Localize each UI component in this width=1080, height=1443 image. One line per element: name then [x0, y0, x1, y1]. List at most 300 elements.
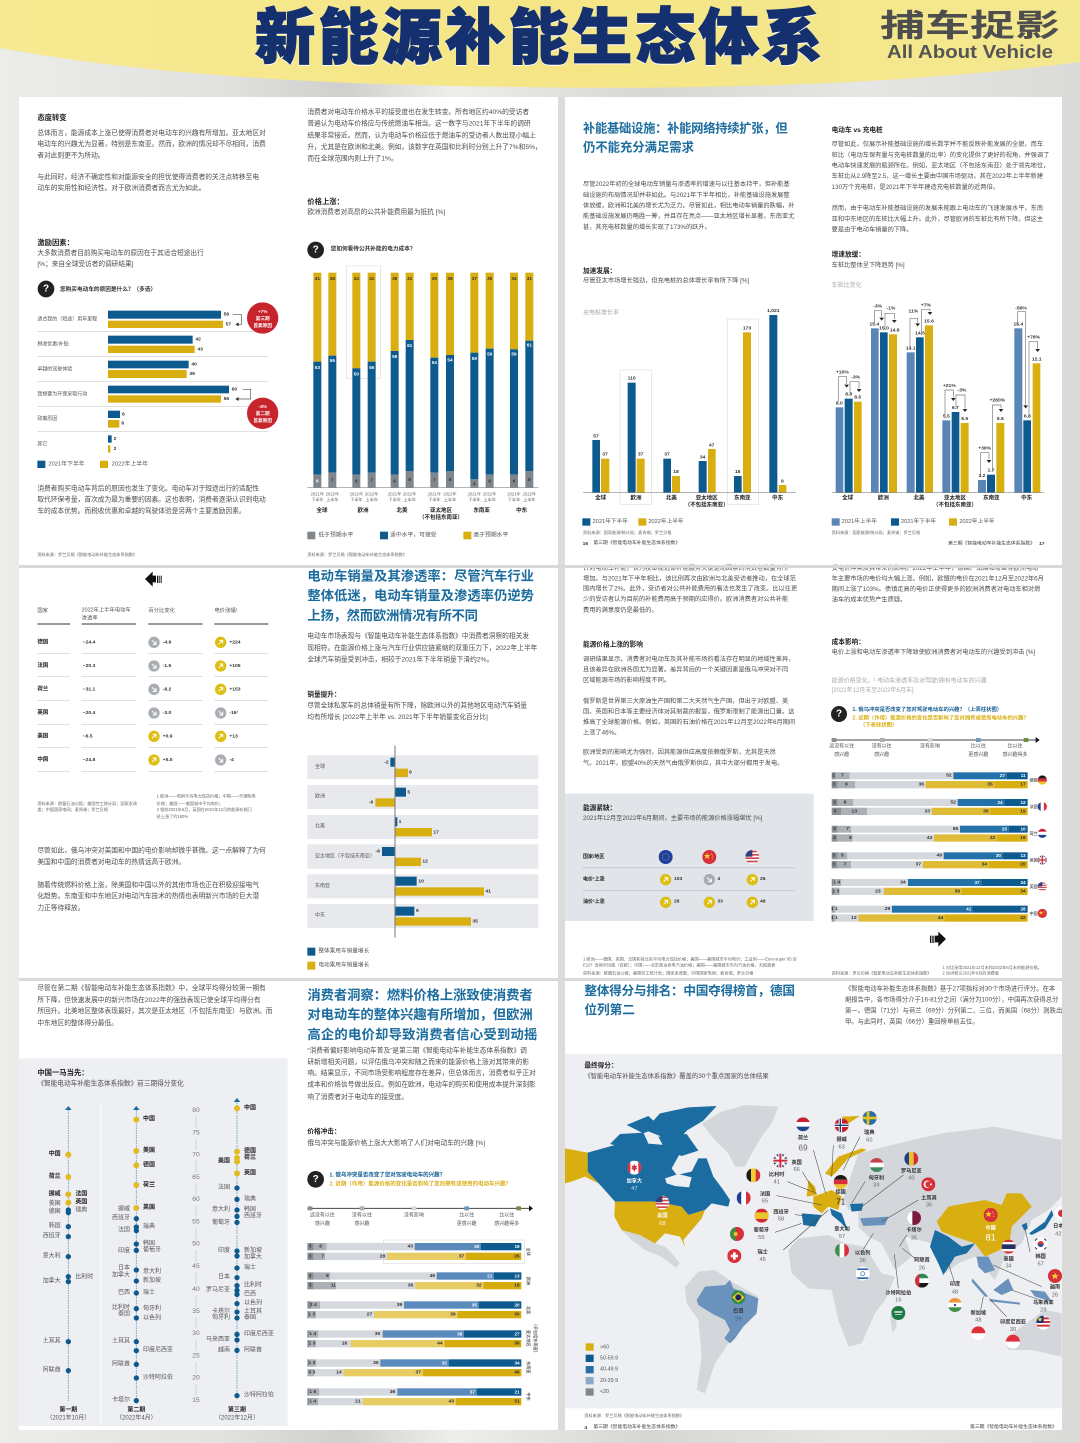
callout: third issue top reason: +7% [258, 309, 268, 314]
Southeast Asia: 30 [373, 1360, 379, 1366]
bar chart: EV to charger ratio: 8.5 [854, 395, 861, 401]
stacked bar chart: public charging cost: 31 [527, 276, 532, 281]
stacked bar chart: public charging cost: 37 [472, 276, 477, 281]
stacked bar chart: public charging cost: 61 [527, 342, 532, 347]
country scores: 69 [798, 1143, 808, 1153]
stacked bar chart: public charging cost: 41 [315, 276, 320, 281]
arrows: change brackets: +7% [921, 303, 932, 309]
bar chart: reasons: 适合我的（短途）用车里程 [37, 315, 97, 322]
legend: 电动乘用车销量增长 [318, 961, 370, 969]
Asia Pacific: 44 [437, 1341, 443, 1347]
bar chart: EV to charger ratio: 8.8 [845, 392, 852, 398]
bar chart: charger growth: 全球 [595, 494, 607, 502]
stacked bar chart: public charging cost: 全球 [317, 506, 328, 514]
chart: third issue: （2022年12月） [215, 1413, 259, 1421]
panel: energy shortage table: 103 [674, 876, 683, 882]
table: EV penetration and electricity prices: +13 [229, 733, 238, 739]
bar chart: charger growth: 37 [602, 452, 608, 458]
text block: 化趋势。东南亚和中东地区对电动汽车技术的热情也表明新兴市场的巨大潜 [37, 891, 259, 900]
callout: second issue top reason: -4% [259, 404, 268, 409]
global: 3 [309, 1253, 312, 1259]
chart: second issue: 德国 [143, 1160, 155, 1168]
scale axis: 比以往 [499, 1212, 514, 1219]
arrows: change brackets: -56% [1015, 305, 1027, 311]
bar chart: sales growth: -2 [384, 760, 389, 766]
heading: 《智能电动车补能生态体系指数》前三期得分变化 [37, 1078, 184, 1087]
chart: second issue: 卡塔尔 [112, 1396, 130, 1404]
chart: third issue: 卡塔尔 [212, 1307, 230, 1315]
table: EV penetration and electricity prices: +5.0 [163, 757, 173, 763]
icon: question: ? [836, 708, 842, 719]
Middle East: 31 [514, 1399, 520, 1405]
USA: 37 [974, 880, 980, 885]
Middle East: 37 [470, 1389, 475, 1394]
text block: “消费者偏好影响电动车普及”是第三期《智能电动车补能生态体系指数》调 [307, 1045, 527, 1054]
heading: 能源价格上涨的影响 [583, 639, 643, 648]
chart: second issue: 韩国 [143, 1239, 155, 1247]
text block: 响。结果显示，不同市场受影响程度存在差异，但总体而言，消费者似乎正对 [307, 1068, 536, 1077]
stacked bar chart: public charging cost: 39 [432, 276, 437, 281]
chart: score axis: 35 [192, 1308, 200, 1315]
footnotes: 1 欧洲——德国、英国、法国和荷兰的平均电力现货价格；美国——美国城市平均电价；工业用——Euro-super 95 自 [583, 955, 797, 961]
chart: second issue: 印度尼西亚 [143, 1346, 173, 1354]
scale axis: 远没有以往 [310, 1212, 335, 1219]
legend: 适中水平，可接受 [390, 530, 437, 538]
Germany: 27 [1000, 773, 1005, 778]
stacked bar chart: public charging cost: 6 [513, 478, 516, 483]
bar chart: EV to charger ratio: （不包括东南亚） [933, 501, 977, 509]
source: 资料来源：罗兰贝格《智能电动车补能生态体系指数》 [307, 551, 407, 557]
heading: 消费者洞察：燃料价格上涨致使消费者 [307, 986, 533, 1002]
bar chart: EV to charger ratio: 中东 [1021, 494, 1033, 502]
country scores: 美国 [657, 1211, 667, 1219]
country scores: 34 [873, 1183, 879, 1189]
chart: third issue: 法国 [218, 1183, 230, 1191]
country scores: 35 [911, 1235, 917, 1241]
text block: 甚，其充电桩数量的增长实现了173%的跃升。 [583, 223, 711, 231]
France: 24 [997, 800, 1003, 805]
country scores: 韩国 [1035, 1252, 1046, 1260]
country scores [627, 1128, 1063, 1333]
bar chart: charger growth: 中东 [772, 494, 784, 502]
scale axis [829, 737, 1040, 758]
chart: third issue: 第三期 [228, 1406, 246, 1414]
icon: question [307, 242, 324, 258]
legend [582, 517, 684, 526]
chart: score axis: 25 [192, 1352, 200, 1359]
legend: 高于预期水平 [473, 530, 508, 538]
country scores: 巴西 [733, 1308, 743, 1315]
country scores: 57 [1038, 1261, 1044, 1267]
Germany: 德国 [1030, 776, 1038, 782]
bar chart: reasons [37, 311, 268, 453]
bar chart: reasons: 2 [114, 446, 117, 452]
heading [307, 986, 537, 1042]
chart: third issue: 马来西亚 [206, 1335, 230, 1343]
country scores: 60 [866, 1138, 872, 1144]
text block: energy impact: 国、英国和日本等主要经济体对其制裁的报复，俄罗斯限制了能源出口量。这 [583, 707, 794, 715]
stacked bar chart: public charging cost: 6 [393, 478, 396, 483]
page footers: 4 [584, 1425, 587, 1431]
chart: second issue: 法国 [118, 1226, 130, 1234]
stacked bar chart: public charging cost: 35 [487, 276, 493, 281]
legend: 2022年上半年 [112, 459, 148, 467]
stacked bar chart: public charging cost: 7 [370, 477, 373, 482]
UK: 5 [841, 853, 844, 859]
country scores: 德国 [835, 1188, 846, 1196]
table: EV penetration and electricity prices: ~24.4 [83, 639, 96, 645]
China: 中国 [1030, 910, 1038, 916]
USA: 1 3 [833, 888, 840, 894]
source: 资料来源：国家能源/统计局；麦肯锡；罗兰贝格 [583, 529, 672, 535]
Europe: 13 [514, 1273, 520, 1278]
icon: question [38, 281, 54, 297]
text block: 成本和价格信号做出反应。例如在欧洲，电动车的购买和使用成本提升深刻影 [307, 1079, 536, 1088]
heading: sales rise: 尽管全球私家车的总体销量有所下降，除欧洲以外的其他地区电动汽车销量 [307, 700, 527, 709]
bar chart: reasons: 其它 [37, 440, 47, 447]
heading: cost impact: 电价上涨和电动车渗透率下降致使欧洲消费者对电动车的兴趣受到冲击 [%] [832, 648, 1035, 656]
text block: energy impact: 上涨了46%。 [583, 728, 620, 736]
stacked bar chart: public charging cost: 2021年 [388, 490, 401, 496]
heading: cost impact: 成本影响： [832, 637, 865, 646]
icon: question [307, 1171, 324, 1188]
text block [832, 140, 1049, 233]
stacked bar chart: public charging cost [307, 266, 538, 521]
heading: price rise [307, 197, 445, 216]
Netherlands [832, 826, 1047, 842]
page footer [948, 539, 1045, 547]
legend [307, 947, 370, 970]
stacked bar chart: public charging cost: 上半年 [326, 496, 339, 502]
heading [583, 121, 788, 155]
bar chart: reasons: 40 [191, 362, 197, 368]
stacked bar chart: public charging cost: 2021年 [468, 490, 481, 496]
heading: acceleration [583, 266, 749, 316]
questions: 1. 俄乌冲突是否改变了您对驾驶电动车的兴趣？ [329, 1170, 445, 1178]
table: EV penetration and electricity prices: 渗透率 [82, 613, 98, 621]
stacked bar chart: public charging cost: 6 [316, 478, 319, 483]
text block: 增加。与2021年下半年相比，该比例再次由欧洲与北美受访者推动，在全球范 [583, 574, 796, 582]
page footers: 第三期《智能电动车补能生态体系指数》 [593, 1423, 680, 1430]
heading: 中国一马当先： [37, 1068, 89, 1077]
China: 41 [966, 906, 972, 911]
text block: 围内增长了2%。此外，受访者对公共补能费用的看法也发生了改变。比以往更 [583, 584, 798, 592]
France: 19 [1020, 808, 1026, 814]
questions: 2. 近期（作用）能源价格的变化是否影响了您对拥有或使用电动车的兴趣？ [852, 713, 1029, 721]
bar chart: EV to charger ratio: 6.8 [1024, 413, 1031, 419]
chart: third issue: 英国 [244, 1168, 256, 1176]
chart: third issue: 瑞士 [244, 1263, 256, 1271]
leader lines [775, 1137, 1042, 1317]
heading: acceleration: 充电桩增长率 [583, 308, 619, 316]
country scores: 36 [860, 1258, 866, 1264]
chart: third issue: 德国 [244, 1147, 256, 1155]
text block: 尽管2022年初的全球电动车销量与渗透率的增速与以往基本持平，但补能基 [583, 180, 790, 188]
text block: 油车的成本优势产生质疑。 [832, 595, 906, 603]
text block: 桩比（电动车保有量与充电桩数量的比率）的变化提供了更好的视角，并强调了 [832, 151, 1049, 159]
text block [37, 983, 273, 1027]
bar chart: EV to charger ratio: 15.4 [869, 321, 879, 327]
country scores: 39 [735, 1316, 741, 1322]
scale axis: 没有以往 [352, 1212, 372, 1219]
chart: first issue: 英国 [75, 1198, 87, 1206]
text block: 美国和中国的消费者对电动车的热情远高于欧洲。 [37, 857, 185, 866]
stacked bar chart: public charging cost: 8 [528, 477, 531, 482]
heading: 上扬，然而欧洲情况有所不同 [307, 607, 478, 623]
bar chart: reasons: 6 [121, 421, 124, 427]
bar chart: reasons: 60 [232, 386, 237, 392]
bar chart: sales growth: -6 [376, 849, 380, 855]
table: EV penetration and electricity prices: -3.0 [163, 710, 171, 716]
UK: 英国 [1030, 856, 1038, 862]
bar chart: charger growth: 东南亚 [734, 494, 751, 502]
legend [307, 530, 508, 539]
scale axis: 没有影响 [404, 1212, 424, 1219]
bar chart: charger growth [583, 308, 796, 509]
Southeast Asia: 东南亚 [526, 1361, 532, 1374]
text block: 第一。德国（71分）与荷兰（69分）分列第二、三位，而美国（68分）则跌出前三 [845, 1005, 1075, 1014]
USA: 39 [954, 888, 960, 894]
bar chart: charger growth: 欧洲 [631, 494, 642, 502]
bar chart: EV to charger ratio [832, 303, 1044, 509]
chart: score axis: 55 [192, 1218, 200, 1225]
table: EV penetration and electricity prices: 美国 [37, 731, 49, 739]
chart: second issue: 日本 [118, 1264, 130, 1272]
France: 30 [983, 808, 989, 814]
North America: 2 4 [310, 1302, 317, 1308]
heading: 电动车 vs 充电桩 [832, 125, 883, 134]
question text: 您如何看待公共补能的电力成本？ [331, 245, 416, 253]
Brazil [697, 1280, 758, 1343]
bar chart: sales growth: 东南亚 [315, 882, 330, 889]
stacked bar chart: public charging cost: 54 [447, 357, 453, 362]
heading: price shock: 俄乌冲突与能源价格上涨大大影响了人们对电动车的兴趣 [%] [307, 1138, 485, 1147]
questions: 1. 俄乌冲突是否改变了您对驾驶电动车的兴趣？（上表柱状图） [852, 705, 1002, 713]
stacked bars: interest by market [831, 772, 1047, 922]
UK: 13 [1020, 853, 1026, 858]
Netherlands: 10 [1020, 826, 1026, 831]
chart: third issue: 泰国 [244, 1313, 256, 1321]
stacked bar chart: public charging cost: 上半年 [523, 496, 536, 502]
country scores: 47 [631, 1186, 637, 1192]
bar chart: charger growth: 37 [638, 452, 644, 458]
heading: slowing growth: 增速放缓： [832, 249, 865, 258]
Middle East: 43 [448, 1399, 454, 1405]
panel: energy price impact [565, 564, 814, 975]
global: 19 [514, 1244, 520, 1249]
stacked bar chart: public charging cost: 上半年 [365, 496, 378, 502]
text block: 尽管在第二期《智能电动车补能生态体系指数》中，全球平均得分较第一期有 [37, 983, 266, 992]
heading: 整体低迷，电动车销量及渗透率仍逆势 [307, 587, 534, 603]
legend: 2021年下半年 [48, 459, 85, 467]
country scores: 58 [778, 1217, 784, 1223]
North America: 39 [397, 1302, 403, 1308]
continents base [622, 1105, 1062, 1393]
footnotes: 资料来源：欧盟石油公报；美国劳工统计局；国家发改委；中国国家电网；麦肯锡；罗兰贝格 [583, 969, 754, 975]
Netherlands: 16 [1020, 835, 1026, 841]
table: EV penetration and electricity prices: +105 [229, 663, 241, 669]
scale axis: 感兴趣 [834, 751, 849, 758]
chart: score axis: 80 [192, 1107, 200, 1114]
footnotes: 价格；美国——美国城市平均电价； [157, 800, 223, 806]
table: EV penetration and electricity prices: 中国 [37, 755, 49, 763]
bar chart: EV to charger ratio: 15.6 [924, 318, 934, 324]
bar chart: charger growth: 9 [781, 479, 784, 485]
bar chart: reasons: 政策原因 [37, 415, 57, 422]
country scores: 泰国 [1003, 1254, 1014, 1262]
heading: motivators: [%；来自全球受访者的调研结果] [37, 259, 134, 268]
chart: first issue: 中国 [49, 1150, 61, 1158]
bar chart: reasons: 42 [195, 337, 201, 343]
heading: motivators [37, 238, 204, 268]
country scores: 英国 [792, 1158, 802, 1166]
country scores: 比利时 [769, 1170, 784, 1178]
UK: 37 [915, 862, 921, 868]
UK: 20 [1020, 862, 1026, 868]
heading: sales rise [307, 689, 527, 721]
stacked bar chart: public charging cost: 欧洲 [358, 506, 369, 514]
Netherlands: 43 [927, 835, 933, 841]
chart: first issue: 第一期 [59, 1406, 77, 1414]
chart: score axis: 65 [192, 1174, 200, 1181]
country scores: 印度尼西亚 [1000, 1317, 1026, 1325]
source: 资料来源：罗兰贝格《智能电动车补能生态体系指数》 [37, 551, 137, 557]
panel: energy shortage table: 26 [674, 899, 680, 905]
China: 1 1 [831, 915, 838, 921]
heading: slowing growth: 车桩比变化 [832, 281, 862, 289]
stacked bar chart: public charging cost: 41 [369, 276, 375, 281]
stacked bar chart: public charging cost: 2021年 [507, 490, 521, 496]
bar chart: sales growth: 1 [399, 819, 402, 825]
global: 43 [407, 1244, 413, 1250]
legend: 整体乘用车销量增长 [318, 947, 370, 955]
stacked bar chart: public charging cost: （不包括东南亚） [419, 513, 463, 521]
heading: acceleration: 加速发展： [583, 266, 616, 275]
heading: 高企的电价却导致消费者信心受到动摇 [307, 1026, 537, 1042]
scale axis: 比以往 [971, 743, 986, 750]
chart: third issue: 西班牙 [244, 1211, 262, 1219]
country scores: 印度 [950, 1280, 960, 1288]
panel: energy shortage table: 33 [717, 899, 723, 905]
heading: cost impact: [2021年12月末至2022年6月末] [832, 686, 914, 694]
chart: second issue: 瑞士 [143, 1288, 155, 1296]
country scores: 越南 [1050, 1283, 1060, 1291]
stacked bar chart: public charging cost: 55 [330, 358, 335, 363]
text block: energy impact: 俄罗斯是世界第三大原油生产国和第二大天然气生产国，但出于对欧盟、美 [583, 697, 788, 705]
chart: third issue [206, 1098, 274, 1421]
text block: 而在全球范围内则上升了1%。 [307, 153, 398, 162]
callout: third issue top reason: 第三期 [256, 315, 270, 322]
stacked bar chart: public charging cost: 31 [407, 276, 413, 281]
stacked bar chart: public charging cost: 8 [449, 477, 452, 482]
North America: 35 [472, 1302, 477, 1307]
country scores: 48 [975, 1317, 981, 1323]
questions [852, 705, 1029, 728]
heading: final scores [584, 1060, 769, 1080]
panel: overall scores and world map [565, 983, 1075, 1431]
country scores: 63 [839, 1144, 845, 1150]
heading: 整体得分与排名：中国夺得榜首，德国 [584, 983, 795, 998]
text block: 甲。与此同时，英国（66分）重回榜单前五位。 [845, 1016, 979, 1025]
bar chart: reasons: 税收优惠/补贴 [37, 340, 69, 347]
table: EV penetration and electricity prices: 荷兰 [37, 684, 49, 692]
text block: 所下降，但快速发展中的新兴市场在2022年的强劲表现已使全球平均得分有 [37, 995, 261, 1004]
text block: 力正等待释放。 [37, 903, 84, 912]
table: EV penetration and electricity prices: ~31.1 [83, 686, 96, 692]
Asia Pacific [307, 1322, 539, 1355]
chart: first issue: 意大利 [43, 1252, 61, 1260]
Germany: 52 [946, 773, 952, 779]
scale axis: 比以往 [1008, 743, 1022, 750]
stacked bar chart: public charging cost: 北美 [397, 506, 408, 514]
table: EV penetration and electricity prices: 德国 [37, 637, 49, 645]
stacked bar chart: public charging cost: 下半年 [388, 496, 401, 502]
text block [845, 983, 1075, 1025]
North America: 北美 [526, 1306, 532, 1315]
text block: 所回升。北美地区整体表现最好，其次是亚太地区（不包括东南亚）与欧洲。而 [37, 1006, 273, 1015]
chart: second issue: 阿联酋 [112, 1359, 130, 1367]
chart: first issue: 荷兰 [49, 1172, 61, 1180]
panel: EV vs charger [832, 125, 1049, 547]
footnotes: 2 动词释义2022年6月的消费者 [942, 969, 999, 975]
chart: third issue: 日本 [218, 1273, 230, 1281]
stacked bar chart: public charging cost: 2021年 [428, 490, 441, 496]
heading: 对电动车的整体兴趣有所增加，但欧洲 [307, 1006, 533, 1022]
global: 37 [459, 1253, 465, 1259]
chart: second issue: 新加坡 [143, 1276, 161, 1284]
chart: score axis: 40 [192, 1286, 200, 1293]
country scores: 16 [895, 1298, 901, 1304]
country scores: 42 [1055, 1231, 1061, 1237]
panel: penetration table [37, 572, 268, 912]
bar chart: EV to charger ratio: 1.7 [988, 468, 995, 474]
legend: <20 [600, 1389, 609, 1395]
Europe: 18 [514, 1283, 520, 1289]
table: EV penetration and electricity prices: ~20.3 [83, 663, 96, 669]
world map [565, 1105, 1062, 1393]
text block: 受电价冲突及其带来的影响。2022年上半年，德国、法国和荷兰等欧洲电动 [832, 564, 1038, 572]
table: EV penetration and electricity prices: +0.9 [163, 733, 173, 739]
bar chart: charger growth: 亚太地区 [696, 494, 718, 502]
Middle East [307, 1388, 532, 1405]
chart: first issue: 德国 [49, 1207, 61, 1215]
Europe: 36 [408, 1283, 414, 1289]
arrows: change brackets [836, 303, 1041, 477]
chart: second issue: 加拿大 [112, 1270, 130, 1278]
scale axis: 感兴趣 [315, 1220, 330, 1227]
arrows: change brackets: +21% [943, 383, 956, 389]
chart: second issue: 瑞典 [143, 1222, 155, 1230]
global: 3 [309, 1244, 312, 1250]
chart: second issue: （2022年4月） [116, 1413, 157, 1421]
text block: 要是由于电动车销量的下降。 [832, 225, 913, 233]
stacked bar chart: public charging cost: 下半年 [350, 496, 363, 502]
stacked bar chart: public charging cost: 53 [315, 365, 320, 370]
text block: changes in reasons: 消费者购买电动车背后的原因也发生了变化。电动车对于短途出行的适配性 [37, 483, 259, 492]
chart: third issue: 印度尼西亚 [244, 1329, 274, 1337]
global: 8 [319, 1244, 322, 1250]
country scores: 瑞典 [864, 1128, 874, 1136]
arrows: change brackets: -3% [958, 388, 967, 394]
heading: price shock: 价格冲击： [307, 1126, 341, 1135]
heading: slowing growth: 车桩比整体呈下降趋势 [%] [832, 261, 905, 269]
chart: first issue: 加拿大 [43, 1277, 61, 1285]
bar chart: charger growth: 173 [743, 325, 751, 331]
country scores: 葡萄牙 [754, 1226, 769, 1234]
chart: first issue: 西班牙 [43, 1232, 61, 1240]
panel: energy shortage table: 26 [760, 876, 766, 882]
Netherlands: 55 [953, 826, 959, 832]
